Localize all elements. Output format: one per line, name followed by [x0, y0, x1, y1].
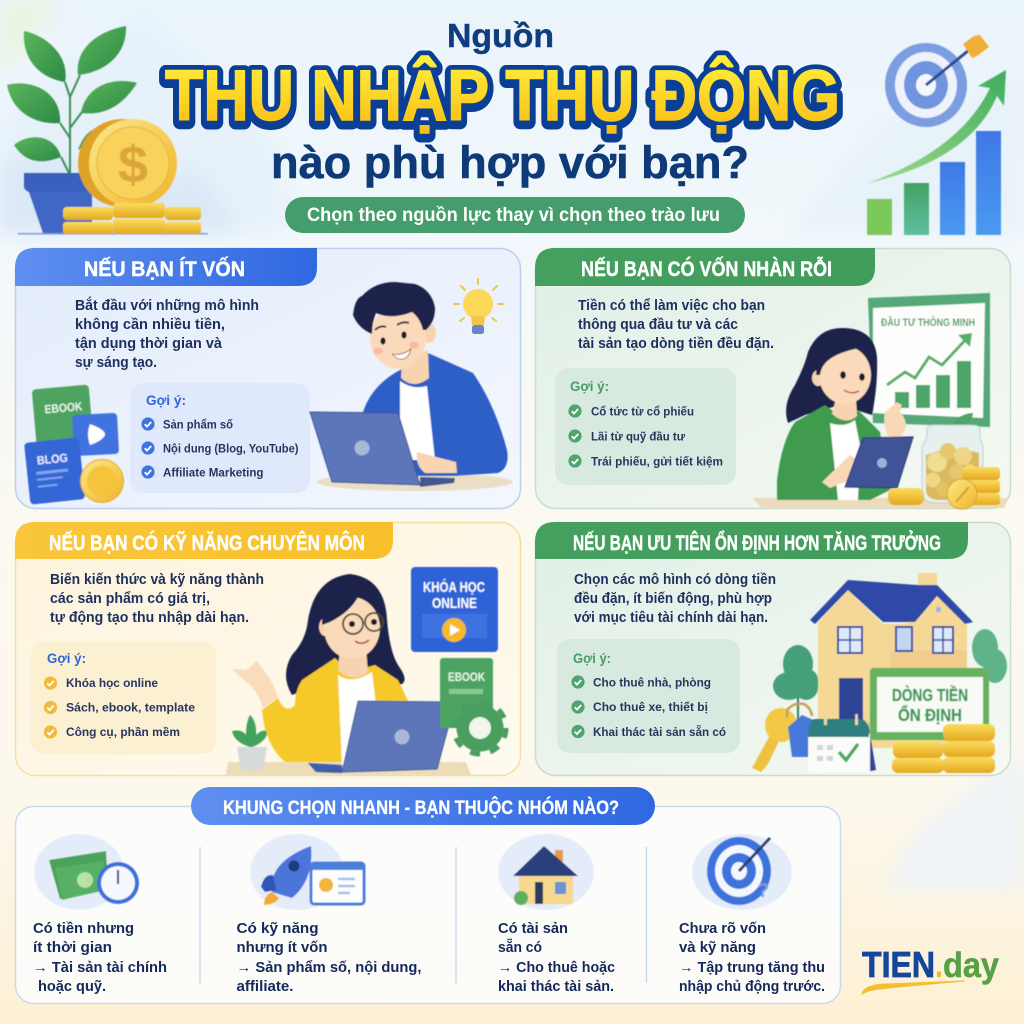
suggestions box: Gợi ý: — [47, 651, 86, 666]
desk and plant — [226, 715, 471, 775]
icon: key and tag — [752, 704, 818, 772]
suggestions box — [557, 639, 740, 753]
panel: quick chooser — [16, 787, 840, 1004]
title line 3: nào phù hợp với bạn? — [271, 137, 749, 188]
text: và kỹ năng — [679, 940, 756, 956]
text — [236, 921, 422, 995]
icon: calendar — [808, 714, 876, 773]
heading — [535, 522, 968, 559]
text — [33, 921, 167, 995]
suggestions box: Khai thác tài sản sẵn có — [593, 724, 726, 739]
text: → Sản phẩm số, nội dung, — [236, 960, 422, 976]
icon: cash and clock — [34, 834, 139, 910]
heading: NẾU BẠN CÓ KỸ NĂNG CHUYÊN MÔN — [49, 530, 365, 555]
leaf — [81, 81, 137, 113]
suggestions box: Cổ tức từ cổ phiếu — [591, 404, 694, 418]
icon: house — [498, 834, 594, 910]
option 3 — [498, 834, 615, 995]
description: không cần nhiều tiền, — [75, 317, 225, 333]
description — [578, 298, 774, 352]
card: ebook with gear — [440, 658, 506, 754]
suggestions box: Cho thuê nhà, phòng — [593, 676, 711, 690]
rising arrow — [868, 70, 1006, 183]
text: → Tập trung tăng thu — [679, 960, 825, 976]
heading — [15, 522, 393, 559]
sign: stable cash flow: DÒNG TIỀN — [892, 684, 968, 705]
logo: . — [935, 944, 943, 985]
illustration: plant with coins — [7, 26, 208, 234]
suggestions box — [130, 383, 310, 493]
description: thông qua đầu tư và các — [578, 317, 738, 333]
option 1 — [33, 834, 167, 995]
coins — [892, 724, 995, 773]
panel: vốn nhàn rỗi — [535, 248, 1010, 509]
text: ít thời gian — [33, 940, 112, 956]
leaf — [24, 31, 66, 82]
text — [498, 921, 615, 995]
text: khai thác tài sản. — [498, 979, 614, 995]
illustration: man with laptop — [310, 282, 513, 491]
suggestions box: Công cụ, phần mềm — [66, 725, 180, 739]
description: sự sáng tạo. — [75, 355, 157, 371]
heading: NẾU BẠN ÍT VỐN — [84, 255, 245, 281]
target — [885, 35, 989, 127]
description: đều đặn, ít biến động, phù hợp — [574, 591, 772, 607]
panel: ít vốn — [15, 248, 520, 508]
heading — [535, 248, 875, 286]
description: với mục tiêu tài chính dài hạn. — [574, 610, 768, 626]
sign: stable cash flow — [870, 668, 989, 740]
suggestions box: Khóa học online — [66, 676, 158, 690]
suggestions box: Cho thuê xe, thiết bị — [593, 700, 708, 714]
icon: digital products — [24, 385, 124, 505]
icon: light bulb — [454, 279, 503, 334]
subtitle pill: Chọn theo nguồn lực thay vì chọn theo trào lưu — [307, 204, 720, 226]
leaf — [14, 137, 61, 161]
text: Có tiền nhưng — [33, 921, 134, 937]
description — [75, 296, 259, 371]
suggestions box: Lãi từ quỹ đầu tư — [591, 430, 685, 444]
sign: stable cash flow: ỔN ĐỊNH — [898, 704, 962, 725]
pot — [24, 173, 92, 233]
leaf — [7, 83, 60, 123]
logo — [862, 944, 999, 994]
description: Biến kiến thức và kỹ năng thành — [50, 572, 264, 588]
icon: digital products: EBOOK — [44, 399, 83, 416]
chart board — [868, 293, 990, 427]
description: Chọn các mô hình có dòng tiền — [574, 572, 776, 588]
description: tự động tạo thu nhập dài hạn. — [50, 610, 249, 626]
heading pill: KHUNG CHỌN NHANH - BẠN THUỘC NHÓM NÀO? — [223, 797, 619, 819]
panel: kỹ năng chuyên môn — [15, 522, 520, 776]
illustration: woman with tablet — [752, 328, 1008, 508]
text: → Tài sản tài chính — [33, 960, 167, 976]
suggestions box: Affiliate Marketing — [163, 466, 264, 480]
heading: NẾU BẠN CÓ VỐN NHÀN RỖI — [581, 255, 832, 281]
description — [574, 572, 776, 626]
description: Bắt đầu với những mô hình — [75, 296, 259, 314]
text: Có tài sản — [498, 921, 568, 937]
text: sẵn có — [498, 938, 542, 956]
subtitle pill — [285, 197, 745, 233]
title line 1: Nguồn — [447, 17, 554, 54]
leaf — [78, 26, 126, 75]
illustration: trees — [773, 629, 1007, 722]
suggestions box: Trái phiếu, gửi tiết kiệm — [591, 454, 723, 468]
big coin — [78, 119, 177, 207]
text: affiliate. — [236, 979, 294, 995]
suggestions box: Nội dung (Blog, YouTube) — [163, 442, 299, 456]
icon: digital products: BLOG — [36, 451, 68, 468]
card: online course: ONLINE — [432, 595, 477, 612]
title line 2: THU NHẬP THỤ ĐỘNG — [165, 58, 840, 138]
card: online course — [411, 567, 498, 652]
logo: day — [943, 946, 999, 985]
description — [50, 572, 264, 626]
text: Có kỹ năng — [236, 921, 318, 937]
card: ebook with gear: EBOOK — [448, 672, 486, 684]
illustration: house — [810, 573, 973, 748]
text: nhưng ít vốn — [236, 940, 328, 956]
description: tài sản tạo dòng tiền đều đặn. — [578, 336, 774, 352]
option 4 — [679, 834, 825, 995]
logo: TIEN — [862, 944, 935, 985]
suggestions box: Sản phẩm số — [163, 418, 233, 432]
text: nhập chủ động trước. — [679, 979, 825, 995]
icon: rocket and window — [250, 834, 364, 910]
suggestions box — [31, 641, 216, 754]
title line 2: THU NHẬP THỤ ĐỘNG — [165, 56, 840, 136]
card: online course: KHÓA HỌC — [423, 578, 485, 596]
title — [165, 17, 840, 188]
coins — [888, 467, 1000, 509]
heading pill — [191, 787, 655, 825]
bar chart — [867, 131, 1001, 235]
illustration: woman presenting — [232, 574, 455, 773]
text: → Cho thuê hoặc — [498, 960, 615, 976]
suggestions box: Sách, ebook, template — [66, 700, 195, 714]
chart board: ĐẦU TƯ THÔNG MINH — [881, 316, 975, 329]
text — [679, 921, 825, 995]
suggestions box: Gợi ý: — [570, 379, 609, 394]
description: Tiền có thể làm việc cho bạn — [578, 298, 765, 314]
text: hoặc quỹ. — [38, 979, 106, 995]
icon: target and question: ? — [757, 880, 769, 902]
description: các sản phẩm có giá trị, — [50, 591, 210, 607]
panel: ổn định — [535, 522, 1010, 776]
icon: target and question — [692, 834, 792, 910]
suggestions box: Gợi ý: — [573, 651, 611, 666]
big coin: $ — [118, 136, 148, 194]
text: Chưa rõ vốn — [679, 921, 766, 937]
suggestions box: Gợi ý: — [146, 393, 186, 408]
description: tận dụng thời gian và — [75, 336, 223, 352]
suggestions box — [555, 368, 736, 485]
heading — [15, 248, 317, 286]
illustration: coin jar — [922, 413, 983, 503]
illustration: target and rising bars — [867, 35, 1006, 235]
coin stacks — [18, 203, 208, 234]
option 2 — [236, 834, 422, 995]
